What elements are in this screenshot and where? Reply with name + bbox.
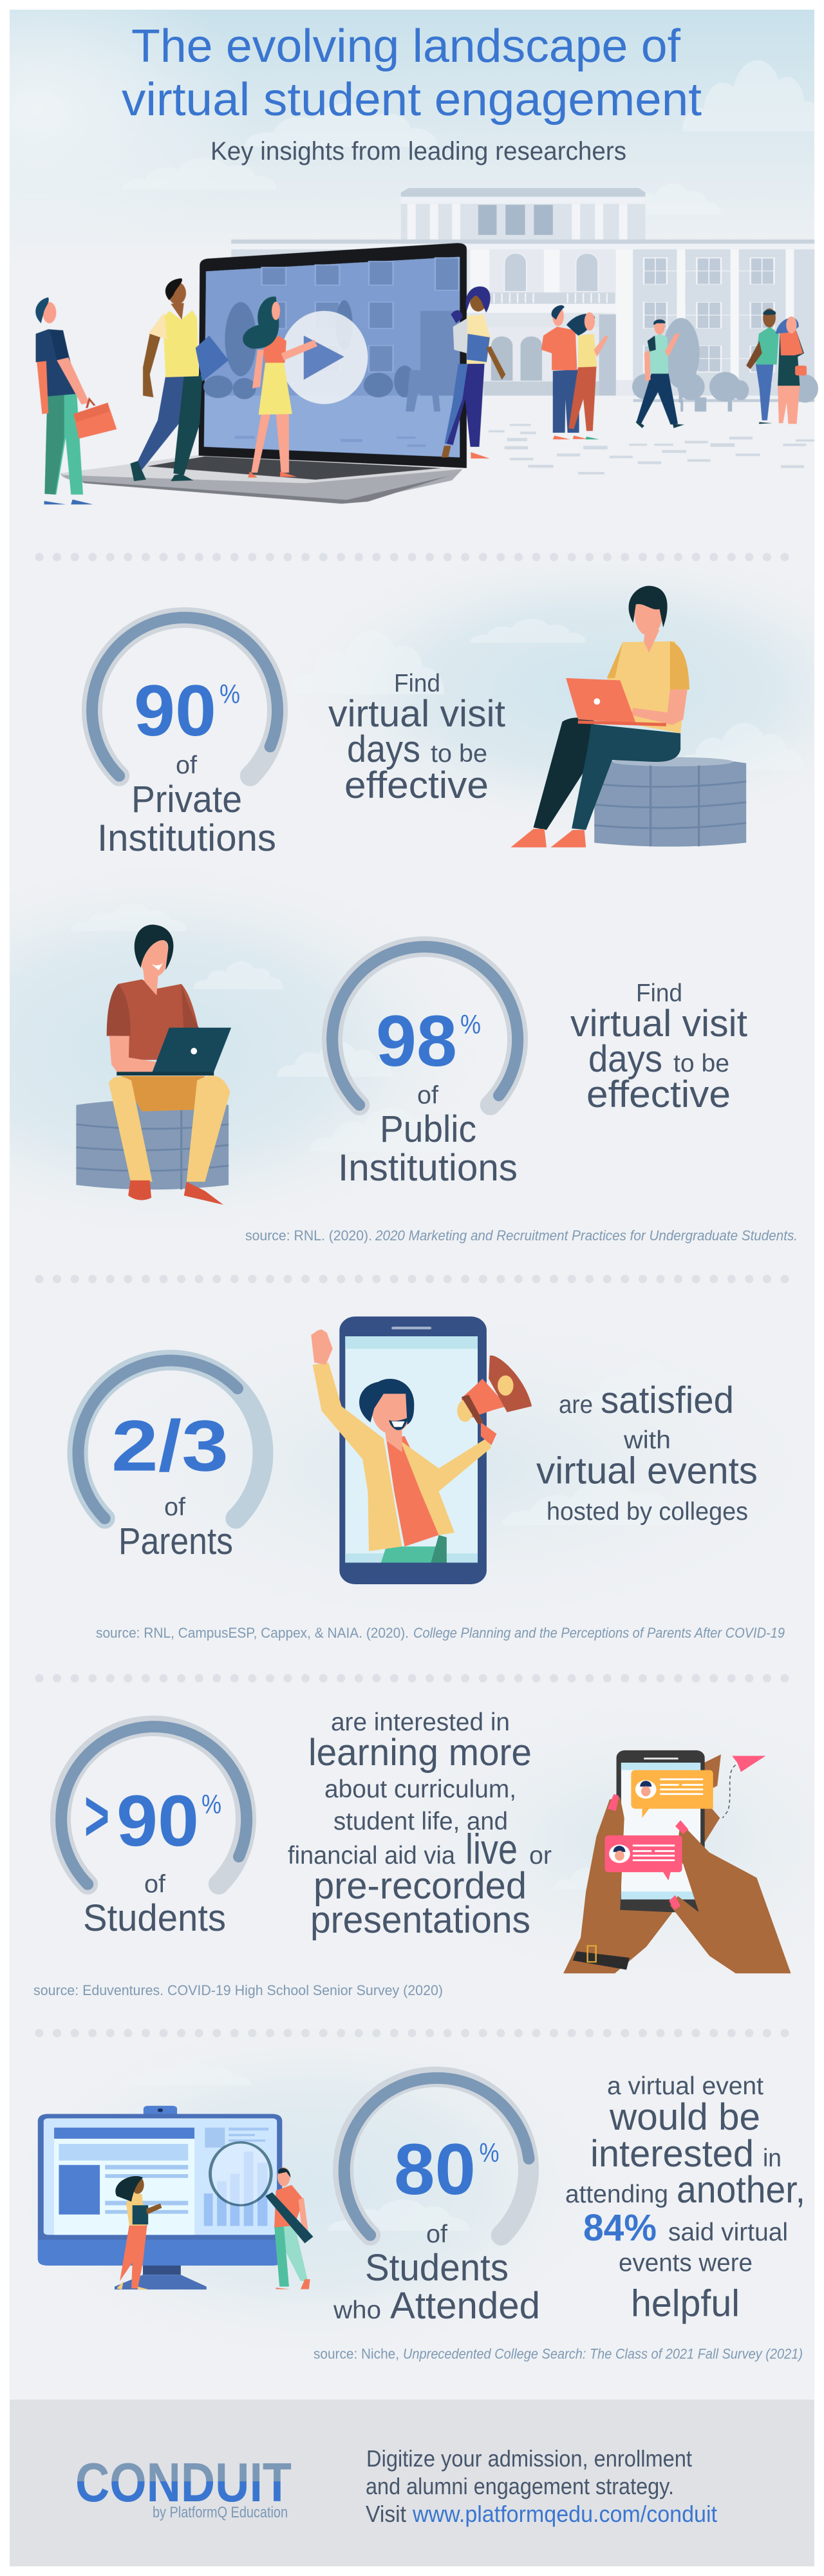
source citation: source: Niche,	[314, 2345, 399, 2362]
logo: Conduit: CONDUIT	[75, 2452, 292, 2514]
text: find virtual visit days: virtual visit	[328, 693, 505, 735]
text: find virtual visit days: to be	[673, 1050, 729, 1077]
text: would be interested in attending another: said virtual	[668, 2219, 788, 2246]
person on seat with orange laptop	[510, 586, 746, 848]
text: find virtual visit days: effective	[344, 764, 489, 806]
source citation	[96, 1625, 785, 1641]
panel: private institutions	[92, 586, 746, 859]
person: woman in yellow skirt	[243, 297, 317, 478]
text: are satisfied with virtual events	[536, 1379, 758, 1526]
panel: students interested	[33, 1709, 791, 1998]
label: of parents: of	[164, 1493, 185, 1521]
source citation: source: RNL. (2020).	[245, 1227, 372, 1244]
person: woman with folder	[442, 287, 505, 459]
label: of students	[83, 1870, 226, 1939]
source citation: source: Eduventures. COVID-19 High School Senior Survey (2020)	[33, 1982, 443, 1998]
person: right pair	[746, 308, 807, 424]
text: find virtual visit days: effective	[586, 1074, 731, 1115]
label: of private institutions: Institutions	[97, 817, 276, 859]
label: of public institutions	[338, 1082, 518, 1189]
call to action text	[366, 2445, 717, 2527]
text: learning more via live presentations	[288, 1709, 552, 1941]
gauge: 98 percent: %	[460, 1009, 481, 1039]
text: would be interested in attending another: 84%	[583, 2207, 657, 2249]
label: of public institutions: of	[417, 1082, 438, 1109]
divider	[39, 2029, 787, 2038]
text: are satisfied with virtual events: hosted by colleges	[547, 1498, 748, 1526]
call to action text: Digitize your admission, enrollment	[366, 2445, 692, 2472]
gauge: two thirds	[78, 1360, 263, 1519]
text: would be interested in attending another: in	[763, 2145, 782, 2172]
gauge: over 90 percent: 90	[117, 1781, 199, 1861]
text: find virtual visit days	[328, 670, 505, 806]
source citation: College Planning and the Perceptions of Parents After COVID-19	[413, 1625, 785, 1641]
text: find virtual visit days	[570, 980, 747, 1115]
text: find virtual visit days: Find	[394, 670, 440, 697]
text: would be interested in attending another: a virtual event	[607, 2072, 763, 2100]
text: would be interested in attending another: attending	[565, 2181, 668, 2208]
label: of students who attended: who	[333, 2297, 381, 2324]
label: of students: of	[144, 1870, 165, 1899]
divider	[39, 1674, 787, 1682]
call to action text: Visit	[366, 2501, 406, 2527]
gauge: 90 percent	[92, 618, 277, 776]
source citation: 2020 Marketing and Recruitment Practices for Undergraduate Students.	[375, 1227, 798, 1244]
label: of private institutions	[97, 752, 276, 859]
gauge: 80 percent: %	[479, 2137, 500, 2168]
text: learning more via live presentations: live	[465, 1825, 518, 1873]
gauge: two thirds: 2/3	[111, 1405, 229, 1486]
text: learning more via live presentations: are interested in	[331, 1709, 510, 1736]
text: learning more via live presentations: or	[529, 1842, 552, 1870]
label: of students: Students	[83, 1897, 226, 1939]
icon: hands holding phone	[563, 1750, 791, 1973]
panel: students who attended	[38, 2072, 805, 2362]
text: learning more via live presentations: presentations	[310, 1899, 530, 1941]
divider	[39, 1275, 787, 1283]
label: of students who attended: Students	[365, 2247, 509, 2289]
person: man with bag	[35, 298, 117, 504]
text: would be interested in attending another: interested	[590, 2133, 754, 2175]
title: The evolving landscape of	[131, 21, 681, 72]
person: walking student	[636, 319, 684, 428]
gauge: 98 percent	[332, 947, 518, 1105]
text: learning more via live presentations: pre-recorded	[314, 1865, 527, 1907]
text: learning more via live presentations: about curriculum,	[324, 1776, 516, 1803]
gauge: over 90 percent	[61, 1726, 247, 1884]
source citation: source: RNL, CampusESP, Cappex, & NAIA. (2020).	[96, 1625, 409, 1641]
person: woman with clipboard	[115, 2176, 162, 2289]
gauge: 80 percent	[343, 2077, 529, 2235]
label: of private institutions: Private	[131, 779, 242, 820]
gauge: 98 percent: 98	[376, 1001, 457, 1081]
text: are satisfied with virtual events: with	[623, 1426, 671, 1454]
person: couple	[541, 305, 608, 439]
play button	[281, 311, 368, 404]
text: learning more via live presentations: learning more	[308, 1732, 532, 1774]
text: are satisfied with virtual events: are	[559, 1391, 593, 1419]
label: of public institutions: Institutions	[338, 1147, 518, 1189]
campus building	[231, 188, 818, 475]
logo: Conduit: CONDUIT	[75, 2452, 292, 2514]
text: find virtual visit days: days	[588, 1038, 662, 1080]
title: virtual student engagement	[122, 74, 702, 126]
label: of students who attended: Attended	[390, 2285, 540, 2327]
text: would be interested in attending another: helpful	[631, 2282, 740, 2325]
laptop screen campus	[203, 257, 460, 447]
title	[122, 21, 702, 126]
divider	[39, 553, 787, 562]
text: would be interested in attending another: another,	[677, 2169, 805, 2211]
text: would be interested in attending another: would be	[609, 2096, 760, 2138]
logo: Conduit: by PlatformQ Education	[153, 2504, 288, 2521]
gauge: 90 percent: 90	[134, 670, 216, 751]
text: learning more via live presentations: financial aid via	[288, 1842, 455, 1870]
label: of private institutions: of	[176, 752, 197, 779]
gauge: 90 percent: %	[220, 679, 240, 709]
label: of students who attended	[333, 2221, 540, 2327]
text: are satisfied with virtual events: satisfied	[601, 1379, 734, 1421]
icon: monitor with researchers	[38, 2106, 314, 2289]
label: of public institutions: Public	[380, 1108, 476, 1150]
text: find virtual visit days: to be	[431, 740, 487, 768]
paving	[489, 424, 814, 475]
label: of parents	[118, 1493, 233, 1562]
gauge: over 90 percent: >	[84, 1776, 109, 1856]
icon: phone with megaphone man	[311, 1316, 532, 1584]
gauge: 80 percent: 80	[394, 2129, 476, 2210]
logo: Conduit	[77, 2463, 291, 2521]
text: find virtual visit days: Find	[636, 980, 682, 1007]
person: man with magnifier	[211, 2143, 314, 2289]
label: of students who attended: of	[426, 2221, 447, 2248]
person: man with book	[130, 278, 229, 481]
label: of parents: Parents	[118, 1520, 233, 1562]
panel: parents	[78, 1316, 785, 1641]
footer band	[10, 2400, 814, 2566]
text: find virtual visit days: virtual visit	[570, 1003, 747, 1045]
text: are satisfied with virtual events: virtual events	[536, 1450, 758, 1492]
laptop	[61, 243, 467, 504]
text: learning more via live presentations: student life, and	[333, 1808, 508, 1835]
hero illustration	[35, 188, 818, 504]
call to action text: and alumni engagement strategy.	[366, 2473, 674, 2499]
text: would be interested in attending another: events were	[619, 2249, 753, 2277]
text: find virtual visit days: days	[347, 728, 420, 770]
gauge: over 90 percent: %	[201, 1789, 221, 1819]
person on seat with dark laptop	[76, 925, 231, 1205]
subtitle: Key insights from leading researchers	[211, 137, 626, 166]
text: would be interested in attending another	[565, 2072, 805, 2325]
call to action text: www.platformqedu.com/conduit	[412, 2501, 717, 2527]
panel: public institutions	[76, 925, 798, 1244]
